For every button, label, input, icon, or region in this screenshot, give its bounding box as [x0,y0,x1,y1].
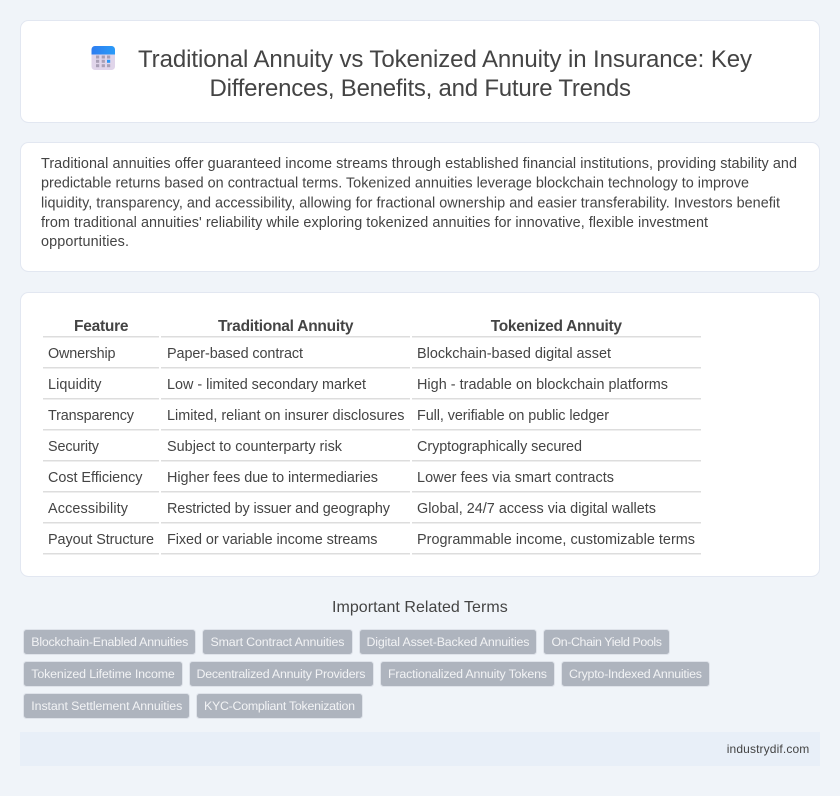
table row: Liquidity [43,377,701,400]
tag: Decentralized Annuity Providers [196,667,366,681]
tag [544,630,670,654]
text block: description paragraph: predictable returns based on contractual terms. Tokenized annuities leverage blockchain technology to improve [41,176,749,192]
tag: Instant Settlement Annuities [31,699,182,713]
table row: Security [43,439,701,462]
table row: Transparency [43,408,701,430]
table row: Transparency: Transparency [48,408,135,424]
heading: related terms: Important Related Terms [332,599,508,616]
title: Differences, Benefits, and Future Trends [210,75,631,102]
table row: Security: Cryptographically secured [417,439,582,455]
tag [360,630,536,654]
tag [196,694,362,718]
tag [190,662,374,686]
panel: description [20,142,820,272]
tag [24,662,182,686]
table row: Ownership: Ownership [48,346,116,362]
tag: Blockchain-Enabled Annuities [31,635,188,649]
table header row: Traditional Annuity [218,318,354,335]
table row: Payout Structure: Programmable income, customizable terms [417,532,695,548]
tag: Smart Contract Annuities [210,635,344,649]
table header row: Feature [74,318,129,335]
tag [24,694,190,718]
tag [202,630,352,654]
table row: Cost Efficiency: Cost Efficiency [48,470,143,486]
table row: Payout Structure [43,532,701,554]
tag: Tokenized Lifetime Income [31,667,175,681]
table row: Accessibility: Restricted by issuer and geography [167,501,391,517]
text block: description paragraph: opportunities. [41,234,129,250]
table row: Cost Efficiency: Higher fees due to intermediaries [167,470,378,486]
table row: Accessibility: Accessibility [48,501,129,517]
table row: Liquidity: Liquidity [48,377,102,393]
panel: comparison table [20,292,820,576]
table row: Ownership [43,346,701,368]
title: Traditional Annuity vs Tokenized Annuity in Insurance: Key [138,46,752,73]
icon: calendar [92,46,115,70]
table row: Accessibility: Global, 24/7 access via digital wallets [417,501,656,517]
table header row: Tokenized Annuity [491,318,622,335]
table row: Accessibility [43,501,701,524]
text block: description paragraph: liquidity, transparency, and accessibility, allowing for fractional ownership and easier transferability. Investors benefit [41,196,780,212]
table row: Cost Efficiency: Lower fees via smart contracts [417,470,614,486]
table row: Ownership: Blockchain-based digital asset [417,346,611,362]
tag [380,662,554,686]
title [138,46,752,102]
table row: Ownership: Paper-based contract [167,346,303,362]
text block: description paragraph: Traditional annuities offer guaranteed income streams through established financial institutions, providing stability and [41,156,797,172]
table row: Payout Structure: Payout Structure [48,532,154,548]
tag: On-Chain Yield Pools [552,635,662,649]
table row: Payout Structure: Fixed or variable income streams [167,532,378,548]
table header row [43,318,701,338]
tag: KYC-Compliant Tokenization [204,699,355,713]
footer [20,732,820,766]
tag: Crypto-Indexed Annuities [569,667,702,681]
panel: title header [20,20,820,122]
table row: Cost Efficiency [43,470,701,492]
table row: Transparency: Limited, reliant on insurer disclosures [167,408,404,424]
table row: Liquidity: High - tradable on blockchain platforms [417,377,668,393]
table row: Security: Security [48,439,100,455]
table row: Liquidity: Low - limited secondary market [167,377,366,393]
table row: Security: Subject to counterparty risk [167,439,343,455]
tag: Digital Asset-Backed Annuities [366,635,530,649]
text block: description paragraph [41,156,797,250]
text block: description paragraph: from traditional annuities' reliability while exploring tokenized annuities for innovative, flexible investment [41,215,708,231]
tag [24,630,196,654]
tag [562,662,710,686]
footer: industrydif.com [727,742,809,756]
tag list: related terms [24,630,710,718]
tag: Fractionalized Annuity Tokens [388,667,547,681]
table row: Transparency: Full, verifiable on public ledger [417,408,609,424]
